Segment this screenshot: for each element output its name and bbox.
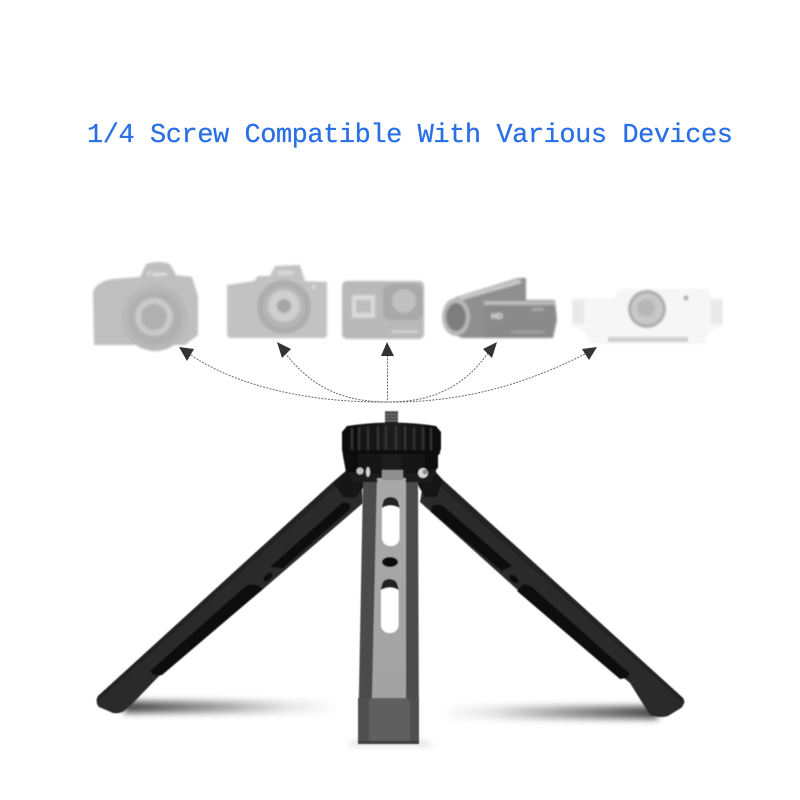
- icon: camcorder: HD: [491, 312, 503, 321]
- arrow: to projector: [388, 347, 597, 402]
- icon: action camera: [342, 281, 424, 339]
- icon: camcorder: [442, 278, 557, 338]
- hinge screws: [356, 467, 428, 478]
- right leg: [415, 468, 684, 717]
- arrows from screw to devices: [179, 342, 597, 402]
- knurled knob: [342, 422, 441, 474]
- center leg: [358, 476, 419, 744]
- lower slot: [381, 579, 398, 633]
- icon: Sony mirrorless camera: [227, 265, 327, 338]
- device row: [93, 262, 723, 351]
- hinge backing: [346, 468, 437, 482]
- arrow: to Sony camera: [277, 342, 388, 402]
- icon: camcorder: SONY: [532, 307, 544, 312]
- icon: Sony mirrorless camera: SONY: [277, 271, 295, 277]
- arrow: to action camera: [381, 342, 394, 402]
- icon: Canon DSLR camera: [93, 262, 198, 351]
- left leg: [97, 470, 368, 713]
- icon: Sony mirrorless camera: II: [313, 285, 316, 291]
- ground shadows: [124, 701, 658, 745]
- hinge block: [382, 470, 403, 480]
- mounting hole: [382, 557, 398, 567]
- arrow: to Canon camera: [179, 347, 388, 402]
- icon: Canon DSLR camera: Canon: [147, 270, 167, 278]
- mounting screw: [385, 411, 398, 424]
- title: 1/4 Screw Compatible With Various Devices: [87, 121, 733, 151]
- icon: projector: [572, 289, 723, 344]
- tripod head: [342, 411, 441, 482]
- arrow: to camcorder: [388, 342, 497, 402]
- upper slot: [382, 497, 400, 546]
- mini tripod: [97, 411, 684, 745]
